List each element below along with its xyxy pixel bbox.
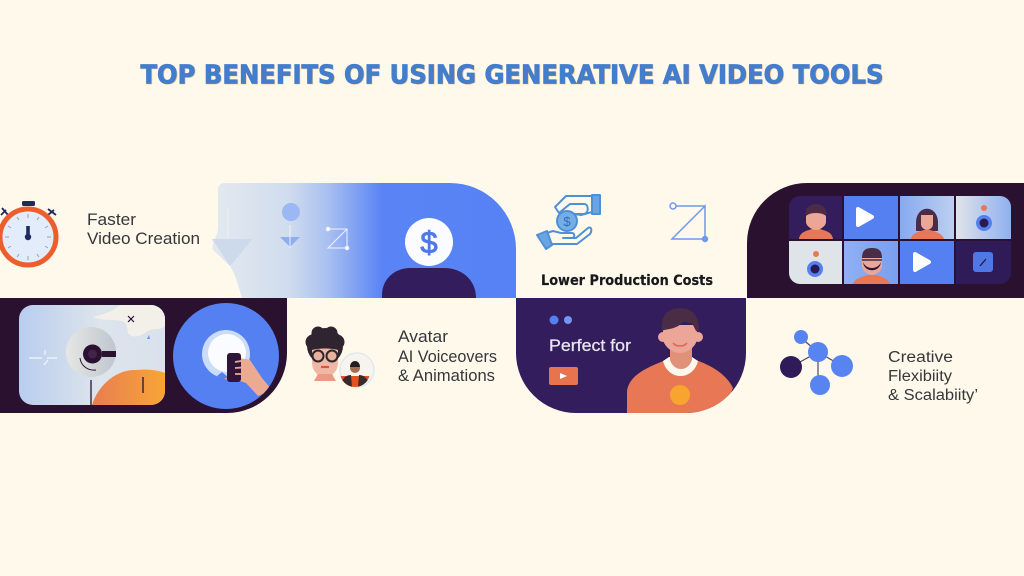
silhouette [382, 268, 476, 298]
cell 3 [900, 196, 954, 239]
text: perfect for: Perfect for [549, 337, 632, 355]
panel: creative flexibility label [780, 330, 978, 404]
panel: lower production costs [537, 195, 713, 289]
text: avatar voiceovers [398, 328, 497, 385]
lens [66, 327, 116, 377]
title: TOP BENEFITS OF USING GENERATIVE AI VIDEO TOOLS [140, 60, 884, 90]
cell 5 [789, 241, 842, 284]
cell 7 [900, 241, 954, 284]
cell 8 [956, 241, 1011, 284]
icon: stopwatch [0, 201, 56, 265]
text: creative flexibility: & Scalabiity’ [888, 387, 978, 404]
panel: avatar label [306, 326, 497, 388]
panel: perfect for [516, 298, 746, 413]
icon: dollar coin: $ [420, 225, 438, 260]
icon: faint funnel arrow [212, 208, 253, 266]
text: avatar voiceovers: AI Voiceovers [398, 348, 497, 366]
icon: resize glyph [326, 227, 349, 250]
text: faster video creation: Faster [87, 211, 137, 229]
blue phone circle [173, 303, 279, 409]
icon: network nodes [780, 330, 853, 395]
crosshair [29, 350, 57, 365]
text: faster video creation [87, 211, 200, 248]
panel: stopwatch label [0, 201, 200, 265]
panel: dark video grid [747, 183, 1024, 298]
dollar on coin: $ [563, 214, 571, 229]
text: creative flexibility: Creative [888, 349, 953, 366]
cell 2 [844, 196, 898, 239]
cell 6 [844, 241, 898, 284]
person [627, 308, 733, 413]
camera card [19, 305, 165, 405]
icon: hands with coin [537, 195, 600, 249]
panel: dark camera panel [0, 298, 287, 413]
video grid [789, 196, 1011, 284]
text: lower production costs: Lower Production Costs [541, 273, 713, 289]
text: faster video creation: Video Creation [87, 230, 200, 248]
icon: resize glyph [670, 203, 708, 242]
title: TOP BENEFITS OF USING GENERATIVE AI VIDEO TOOLS [141, 61, 884, 91]
panel: blue cost banner [212, 183, 516, 298]
icon: avatars [306, 326, 374, 388]
dots [550, 316, 572, 324]
icon: node with arrow [280, 203, 300, 248]
text: creative flexibility [888, 349, 978, 404]
icon: dollar coin [405, 218, 453, 266]
cell 1 [789, 196, 842, 239]
text: avatar voiceovers: & Animations [398, 367, 495, 385]
text: creative flexibility: Flexibiity [888, 368, 952, 385]
cell 4 [956, 196, 1011, 239]
icon: play button [549, 367, 578, 385]
text: avatar voiceovers: Avatar [398, 328, 449, 346]
close mark [128, 316, 134, 322]
